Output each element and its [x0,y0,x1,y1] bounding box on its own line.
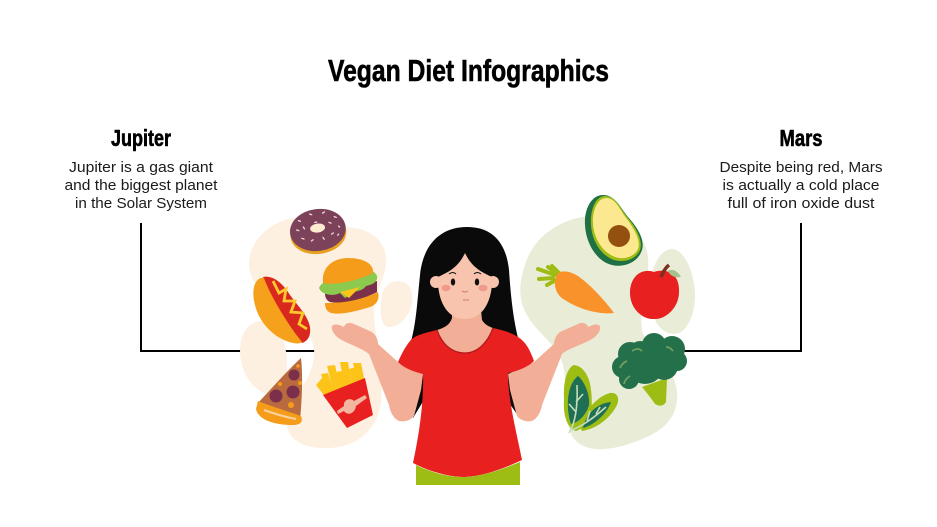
face [438,253,492,319]
icon: apple [630,265,681,319]
icon: spinach leaves [564,365,618,433]
right text block: Mars: Mars [780,125,822,151]
right arm [508,323,600,421]
ears [430,276,442,288]
right text block: Mars: Despite being red, Mars [720,159,882,176]
left text block: Jupiter: in the Solar System [75,195,207,212]
pants [416,462,520,485]
hair [410,227,520,418]
icon: carrot [538,266,614,313]
right blobs: healthy food background [520,216,695,449]
right text block: Mars: is actually a cold place [722,177,880,194]
right connector line [682,223,801,351]
woman illustration [332,227,600,485]
left text block: Jupiter: Jupiter is a gas giant [69,159,214,176]
shirt [398,328,534,477]
left text block: Jupiter: Jupiter [111,125,171,151]
icon: donut [287,205,349,258]
shirt neckline trim [437,328,493,353]
left connector line [141,223,316,351]
icon: burger [319,258,379,314]
icon: pizza slice [256,358,302,425]
left text block: Jupiter [64,125,218,212]
right text block: Mars: full of iron oxide dust [728,195,875,212]
left text block: Jupiter: and the biggest planet [64,177,218,194]
icon: french fries [316,362,373,428]
right text block: Mars [720,125,882,212]
left arm [332,323,423,421]
left blobs: unhealthy food background [240,218,412,448]
icon: hot dog [253,277,310,343]
icon: avocado [585,195,643,266]
eyes [451,278,455,286]
icon: broccoli [612,333,687,406]
neck and chest [437,300,493,353]
cheeks [442,285,450,291]
title: Vegan Diet Infographics [328,53,609,88]
